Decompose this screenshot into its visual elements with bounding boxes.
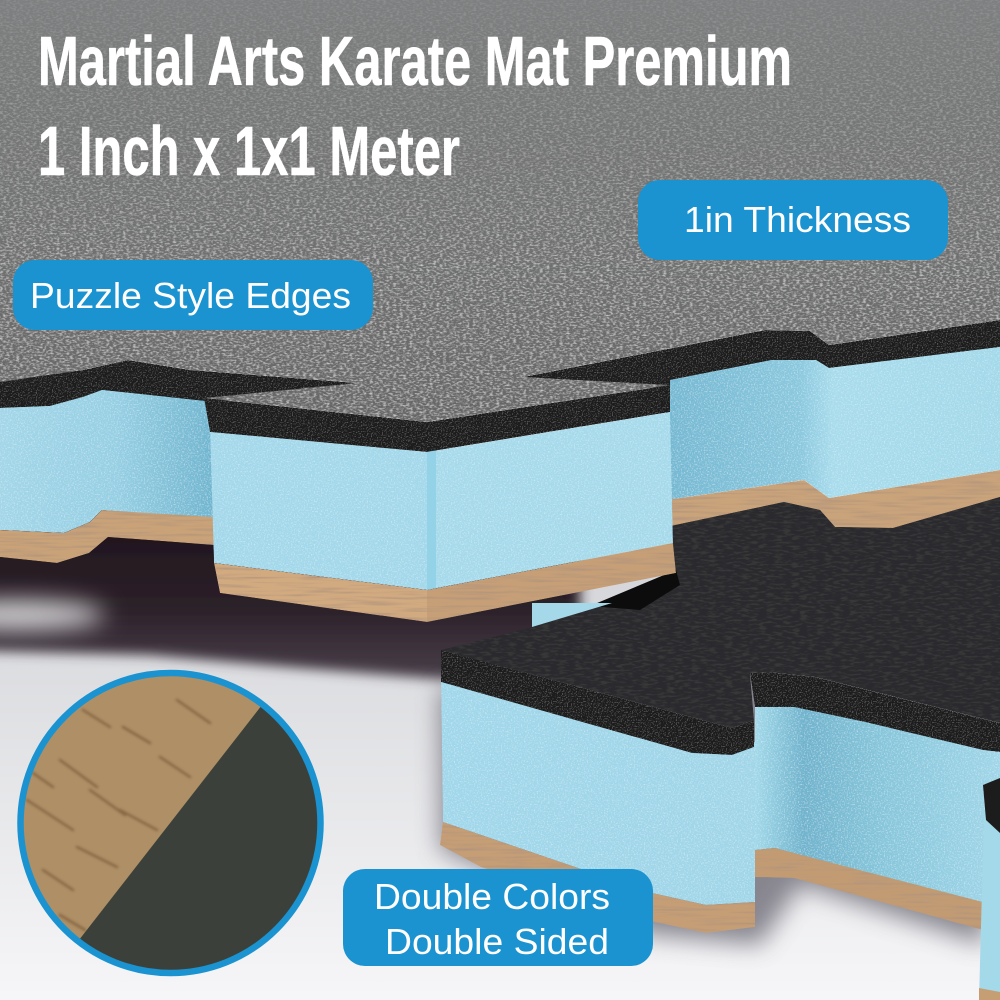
swatch: dark side <box>80 707 318 970</box>
upper mat: black band tab <box>204 385 670 452</box>
lower mat: black top surface <box>441 490 1000 728</box>
upper mat: tab left blue face <box>210 430 427 590</box>
upper mat: textured gray top surface <box>0 0 1000 422</box>
upper mat: soft light wash at far end <box>0 0 1000 260</box>
upper mat: left blue wall <box>0 385 214 533</box>
upper mat: tab right blue face <box>427 412 673 590</box>
upper mat <box>0 0 1000 622</box>
background floor <box>0 520 1000 1000</box>
lower mat: front black band <box>441 650 754 755</box>
floor shadow under upper mat <box>0 500 580 680</box>
lower mat: front blue wall <box>441 678 755 905</box>
title line 2: 1 Inch x 1x1 Meter <box>38 112 460 190</box>
lower mat <box>440 490 1000 933</box>
lower mat: notch wood layer <box>755 848 983 930</box>
upper mat: tab right wood <box>427 543 676 622</box>
upper mat: tab left wood <box>214 563 427 622</box>
far right: blue wall <box>979 815 1000 1000</box>
title <box>38 22 792 190</box>
swatch: wood grain streaks <box>27 700 210 930</box>
floor shadow under lower mat <box>440 640 985 945</box>
callout: double colors double sided: Double Sided <box>385 921 609 962</box>
lower mat: shadow beneath upper tab <box>590 570 680 610</box>
callout: puzzle style edges <box>13 260 373 330</box>
callout: 1in thickness <box>638 180 948 260</box>
callout: 1in thickness: 1in Thickness <box>684 199 911 240</box>
upper mat: black band right <box>523 320 1000 390</box>
far right: black corner <box>983 778 1000 833</box>
upper mat: right blue wall <box>666 340 1000 500</box>
callout: puzzle style edges: Puzzle Style Edges <box>30 275 351 316</box>
lower mat: blue sliver behind <box>532 603 612 627</box>
lower mat: notch black band <box>750 672 1000 752</box>
upper mat: black band left <box>0 360 357 408</box>
far right: wood bottom <box>979 988 1000 1000</box>
upper mat: right wood layer <box>666 470 1000 528</box>
callout: double colors double sided <box>343 869 653 966</box>
lower mat: notch blue wall <box>755 700 1000 910</box>
upper mat: tab corner seam <box>427 450 436 590</box>
far right mat piece <box>979 778 1000 1000</box>
swatch: wood side <box>24 676 260 938</box>
icon: wood and dark color swatch circle <box>20 673 340 985</box>
callout: double colors double sided: Double Colors <box>374 876 610 917</box>
upper mat: left wood layer <box>0 510 214 563</box>
lower mat: front wood layer <box>440 822 755 933</box>
